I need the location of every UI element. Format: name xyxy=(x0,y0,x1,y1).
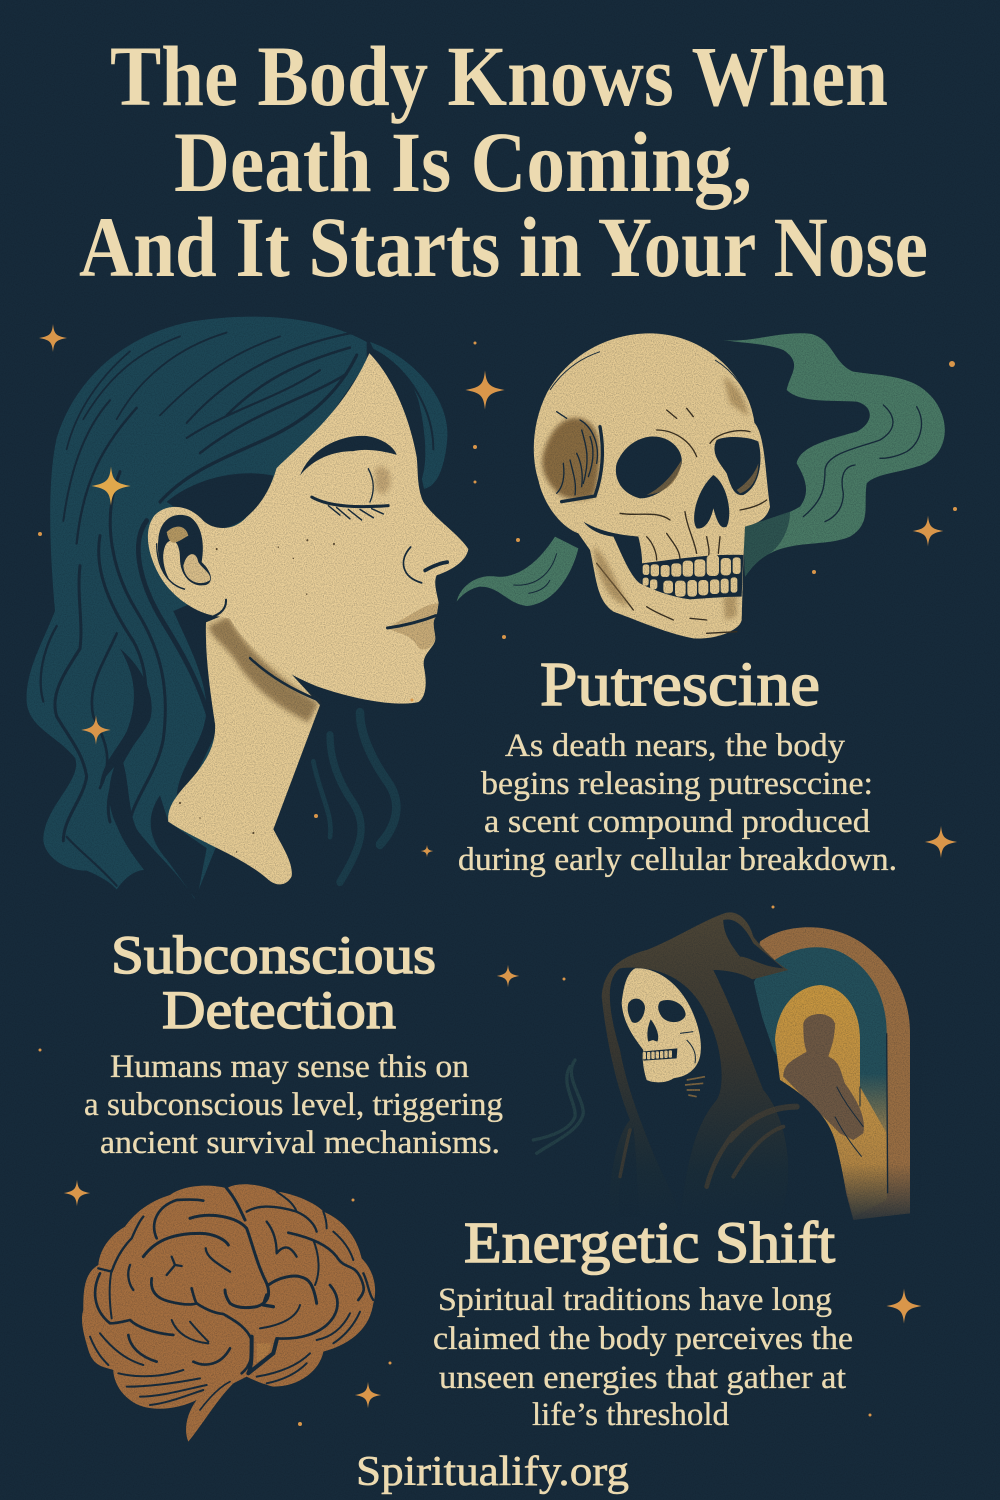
text: Energetic Shift description: life’s threshold xyxy=(532,1397,729,1433)
text: Energetic Shift description: Spiritual traditions have long xyxy=(438,1282,832,1318)
heading: Subconscious Detection: Subconscious xyxy=(111,925,436,985)
eye shadow xyxy=(375,467,391,494)
hair xyxy=(27,317,447,901)
text: Subconscious description: a subconscious level, triggering xyxy=(84,1087,503,1123)
wisp xyxy=(533,1060,583,1153)
neck xyxy=(168,611,320,884)
heading: Putrescine: Putrescine xyxy=(540,651,820,719)
heading: Subconscious Detection: Detection xyxy=(162,980,396,1040)
illustration: hooded reaper and arch xyxy=(533,912,921,1220)
text: Putrescine description: during early cellular breakdown. xyxy=(458,842,897,878)
text: Putrescine description xyxy=(458,728,897,878)
text: Subconscious description: ancient survival mechanisms. xyxy=(100,1125,500,1161)
text: Subconscious description xyxy=(84,1049,503,1161)
heading: Subconscious Detection xyxy=(111,925,436,1040)
heading: Energetic Shift: Energetic Shift xyxy=(464,1210,835,1275)
illustration: skull with smoke xyxy=(457,333,945,639)
text: Putrescine description: a scent compound produced xyxy=(484,804,871,840)
forehead gap xyxy=(367,346,425,479)
illustration: brain xyxy=(82,1184,375,1442)
brain folds xyxy=(90,1188,373,1410)
text: Putrescine description: begins releasing putresccine: xyxy=(481,766,873,802)
text: Energetic Shift description: unseen energies that gather at xyxy=(439,1360,846,1396)
text: Energetic Shift description xyxy=(433,1282,853,1433)
face xyxy=(148,353,468,704)
decorative stars xyxy=(38,324,957,1426)
title xyxy=(79,28,928,295)
text: Subconscious description: Humans may sense this on xyxy=(110,1049,469,1085)
ear xyxy=(157,515,226,619)
face specks xyxy=(179,539,335,853)
cheek lines xyxy=(597,408,767,633)
temple shadow xyxy=(542,418,600,500)
jaw gap xyxy=(583,522,642,583)
teeth xyxy=(640,555,743,599)
neck shadow xyxy=(208,617,318,722)
nose detail xyxy=(403,547,447,583)
text: Energetic Shift description: claimed the body perceives the xyxy=(433,1321,853,1357)
nose cavity xyxy=(694,475,729,528)
robe shadows xyxy=(610,919,850,1217)
illustration: woman in profile xyxy=(27,317,468,901)
robe folds xyxy=(620,1107,797,1187)
lips xyxy=(387,604,438,650)
footer: website: Spiritualify.org xyxy=(356,1449,629,1495)
title: Death Is Coming, xyxy=(174,114,752,210)
smoke left xyxy=(457,537,578,606)
arch xyxy=(752,927,921,1220)
robe xyxy=(602,912,850,1217)
eyebrow xyxy=(300,436,397,476)
text: Putrescine description: As death nears, the body xyxy=(505,728,846,764)
title: The Body Knows When xyxy=(110,28,888,124)
eye sockets xyxy=(616,437,682,498)
skull xyxy=(534,333,770,639)
smoke right xyxy=(723,333,945,577)
reaper skull xyxy=(622,968,705,1097)
closed eye xyxy=(312,469,388,520)
jaw line xyxy=(250,658,317,699)
